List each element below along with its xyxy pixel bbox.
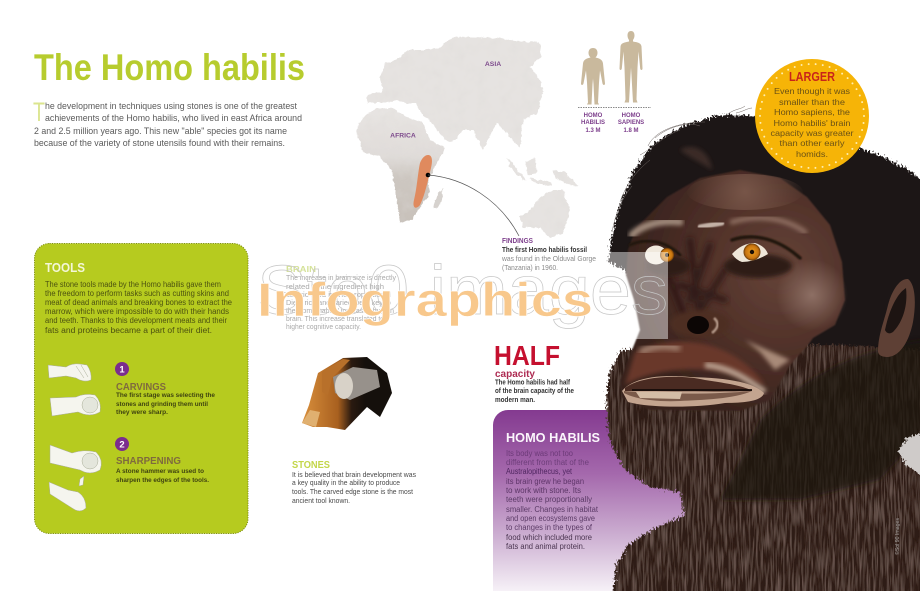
step 2 text <box>116 468 209 484</box>
panel body text: Its body was not too <box>506 449 574 458</box>
panel body text: Australopithecus, yet <box>506 467 573 476</box>
figure: Homo habilis silhouette <box>581 48 605 104</box>
right eye <box>732 243 768 262</box>
step 1 text: The first stage was selecting the <box>116 392 215 399</box>
badge heading: LARGER <box>789 70 835 84</box>
step 1 heading: CARVINGS <box>116 382 166 393</box>
eye sockets <box>646 254 792 278</box>
watermark infographics wordmark: Infographics <box>257 273 593 326</box>
badge text: homids. <box>796 149 828 159</box>
badge text: Homo habilis' brain <box>774 118 851 128</box>
half capacity callout: modern man. <box>495 397 535 404</box>
badge text <box>770 86 854 159</box>
step 1 text: stones and grinding them until <box>116 401 208 408</box>
height comparison <box>578 31 651 134</box>
tools heading: TOOLS <box>45 261 85 275</box>
half capacity callout <box>494 340 574 404</box>
intro text block: he development in techniques using stones is one of the greatest <box>45 101 297 111</box>
brow ridge <box>630 218 805 330</box>
stones text block: STONES <box>292 459 330 471</box>
step 1 text: they were sharp. <box>116 409 168 416</box>
half capacity callout: HALF <box>494 340 560 371</box>
map landmasses <box>357 37 578 238</box>
panel heading: HOMO HABILIS <box>506 430 600 445</box>
watermark <box>257 251 668 339</box>
findings callout: FINDINGS <box>502 238 533 245</box>
stones text block: tools. The carved edge stone is the most <box>292 488 413 496</box>
tools body text: meat of dead animals and breaking bones to extract the <box>45 298 232 307</box>
findings callout <box>501 238 596 272</box>
panel body text: its brain grew he began <box>506 477 584 486</box>
step 1 text <box>116 392 215 416</box>
illustration: Homo habilis head <box>606 106 920 591</box>
step 2 text: sharpen the edges of the tools. <box>116 477 209 484</box>
step 1 marker: 1 <box>119 364 125 376</box>
icon: hands holding stones, carving <box>48 364 100 416</box>
brain text block: The increase in brain size is directly <box>286 273 396 282</box>
forehead highlight <box>687 174 803 210</box>
half capacity callout: of the brain capacity of the <box>495 388 574 395</box>
hair highlight <box>680 147 712 170</box>
badge: larger <box>755 59 869 173</box>
intro text block: T <box>33 97 45 127</box>
panel body text <box>506 449 599 551</box>
panel body text: to changes in the types of <box>506 523 593 532</box>
brain text block: BRAIN <box>286 265 316 274</box>
brain text block: related to the ingredient high <box>286 282 384 291</box>
habitat range in east Africa <box>413 155 432 208</box>
figure: Homo sapiens silhouette <box>620 31 642 102</box>
tools body text: the freedom to perform tasks such as cutting skins and <box>45 289 229 298</box>
findings callout: (Tanzania) in 1960. <box>502 265 558 272</box>
panel body text: and open ecosystems gave <box>506 514 595 523</box>
badge text: capacity was greater <box>770 128 854 138</box>
step 2 marker <box>115 437 129 451</box>
stones text block: ancient tool known. <box>292 497 350 505</box>
badge text: Even though it was <box>774 86 850 96</box>
brain text block: the Homo habilis' increased human <box>286 306 394 315</box>
step 1 marker <box>115 362 129 376</box>
half capacity callout: The Homo habilis had half <box>495 380 571 386</box>
tools body text: marrow, which were impossible to do with their hands <box>45 307 229 316</box>
findings callout: was found in the Olduval Gorge <box>501 256 596 263</box>
intro text block: 2 and 2.5 million years ago. This new "able" species got its name <box>34 126 287 136</box>
panel: Homo habilis <box>493 410 720 591</box>
panel body text: fats and animal protein. <box>506 542 585 551</box>
watermark outline wordmark: Sto0 images <box>257 251 668 329</box>
face <box>620 170 845 411</box>
muzzle <box>625 340 790 392</box>
step 2 text: A stone hammer was used to <box>116 468 204 475</box>
panel body text: teeth were proportionally <box>506 495 592 504</box>
findings callout: The first Homo habilis fossil <box>502 247 587 254</box>
height labels: HOMO <box>584 113 603 119</box>
height labels: 1.8 M <box>623 128 639 134</box>
panel body text: smaller. Changes in habitat <box>506 505 599 514</box>
copyright note: ©Sol 90 Images <box>894 517 901 555</box>
height labels: 1.3 M <box>585 128 601 134</box>
tools body text: The stone tools made by the Homo habilis gave them <box>45 280 221 289</box>
tools body text <box>45 280 232 335</box>
badge text: Homo sapiens, the <box>774 107 850 117</box>
intro text block <box>33 97 302 148</box>
badge text: smaller than the <box>779 97 845 107</box>
panel body text: food which included more <box>506 533 593 542</box>
panel body text: to work with stone. Its <box>506 486 581 495</box>
intro text block: achievements of the Homo habilis, who lived in east Africa around <box>45 113 302 123</box>
brain text block: brain. This increase translated to <box>286 314 384 323</box>
intro text block: because of the variety of stone utensils found with their remains. <box>34 138 285 148</box>
beard, neck and shoulder fur <box>606 345 920 591</box>
fossil location pointer <box>426 173 519 236</box>
label: Africa: AFRICA <box>390 132 416 140</box>
height labels <box>581 113 644 134</box>
brain text block <box>286 265 396 331</box>
brain text block: Diets rich and varied were key to <box>286 298 391 307</box>
height labels: SAPIENS <box>618 120 644 126</box>
stones text block: a key quality in the ability to produce <box>292 479 400 487</box>
stray hair strands <box>612 106 752 232</box>
left eye <box>645 246 674 264</box>
world map <box>357 37 578 238</box>
stones text block <box>292 459 416 505</box>
tools body text: fats and proteins became a part of their diet. <box>45 326 212 335</box>
icon: fossil skull <box>302 357 392 430</box>
ear <box>878 279 915 357</box>
mouth <box>622 376 764 407</box>
darker fur under jaw and on the right side <box>720 340 920 500</box>
brain text block: caloric food in the proportional <box>286 290 391 299</box>
half capacity callout: capacity <box>495 369 535 380</box>
tools body text: and teeth. Thanks to this development meats and their <box>45 316 227 325</box>
stones text block: It is believed that brain development was <box>292 471 416 479</box>
brain text block: higher cognitive capacity. <box>286 322 361 331</box>
panel: tools <box>34 244 248 534</box>
hair <box>608 115 920 460</box>
cheek highlight <box>776 259 848 331</box>
height labels: HABILIS <box>581 120 605 126</box>
step 2 marker: 2 <box>119 440 125 450</box>
gap of background behind the neck <box>898 432 920 478</box>
step 2 heading: SHARPENING <box>116 456 181 467</box>
nose <box>670 310 730 338</box>
title: The Homo habilis <box>34 47 305 88</box>
label: Asia: ASIA <box>485 61 501 68</box>
badge text: than other early <box>780 138 845 148</box>
icon: hands with stone hammer, sharpening <box>49 445 101 511</box>
panel body text: different from that of the <box>506 458 590 467</box>
height labels: HOMO <box>622 113 641 119</box>
